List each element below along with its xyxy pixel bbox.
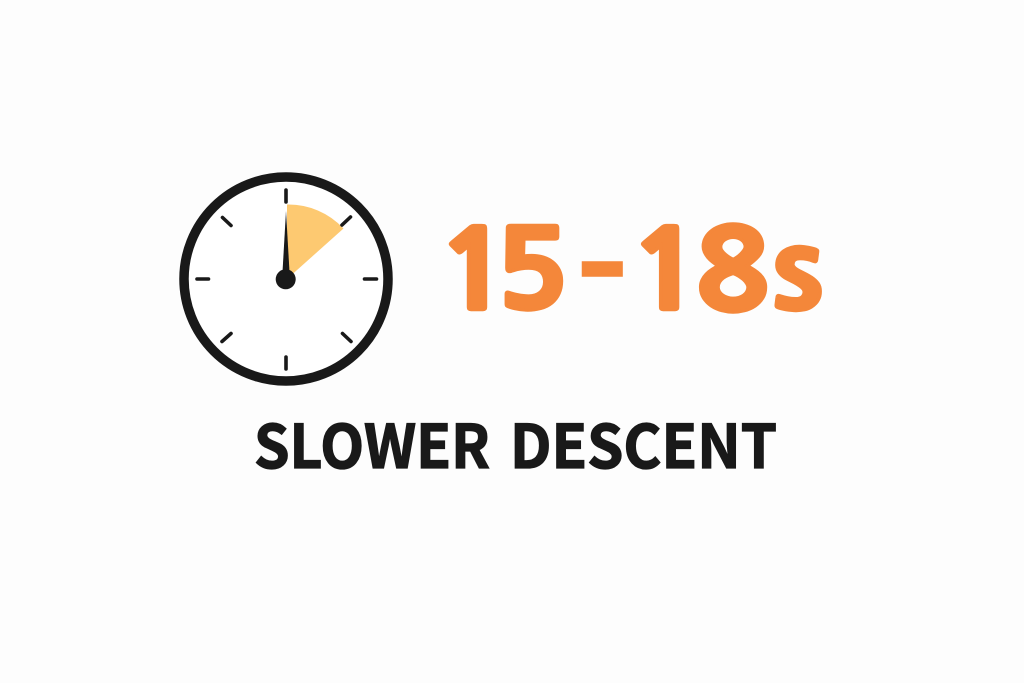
clock hub xyxy=(276,269,296,289)
clock face and rim xyxy=(184,177,388,381)
caption word: slower: SLOWER xyxy=(254,399,490,486)
highlighted time wedge xyxy=(287,204,344,279)
clock hand xyxy=(282,211,290,272)
hour ticks xyxy=(197,190,376,369)
caption xyxy=(254,399,777,486)
caption word: descent: DESCENT xyxy=(510,399,777,486)
duration figure: 15–18s xyxy=(438,217,823,325)
icon: clock xyxy=(184,177,388,381)
